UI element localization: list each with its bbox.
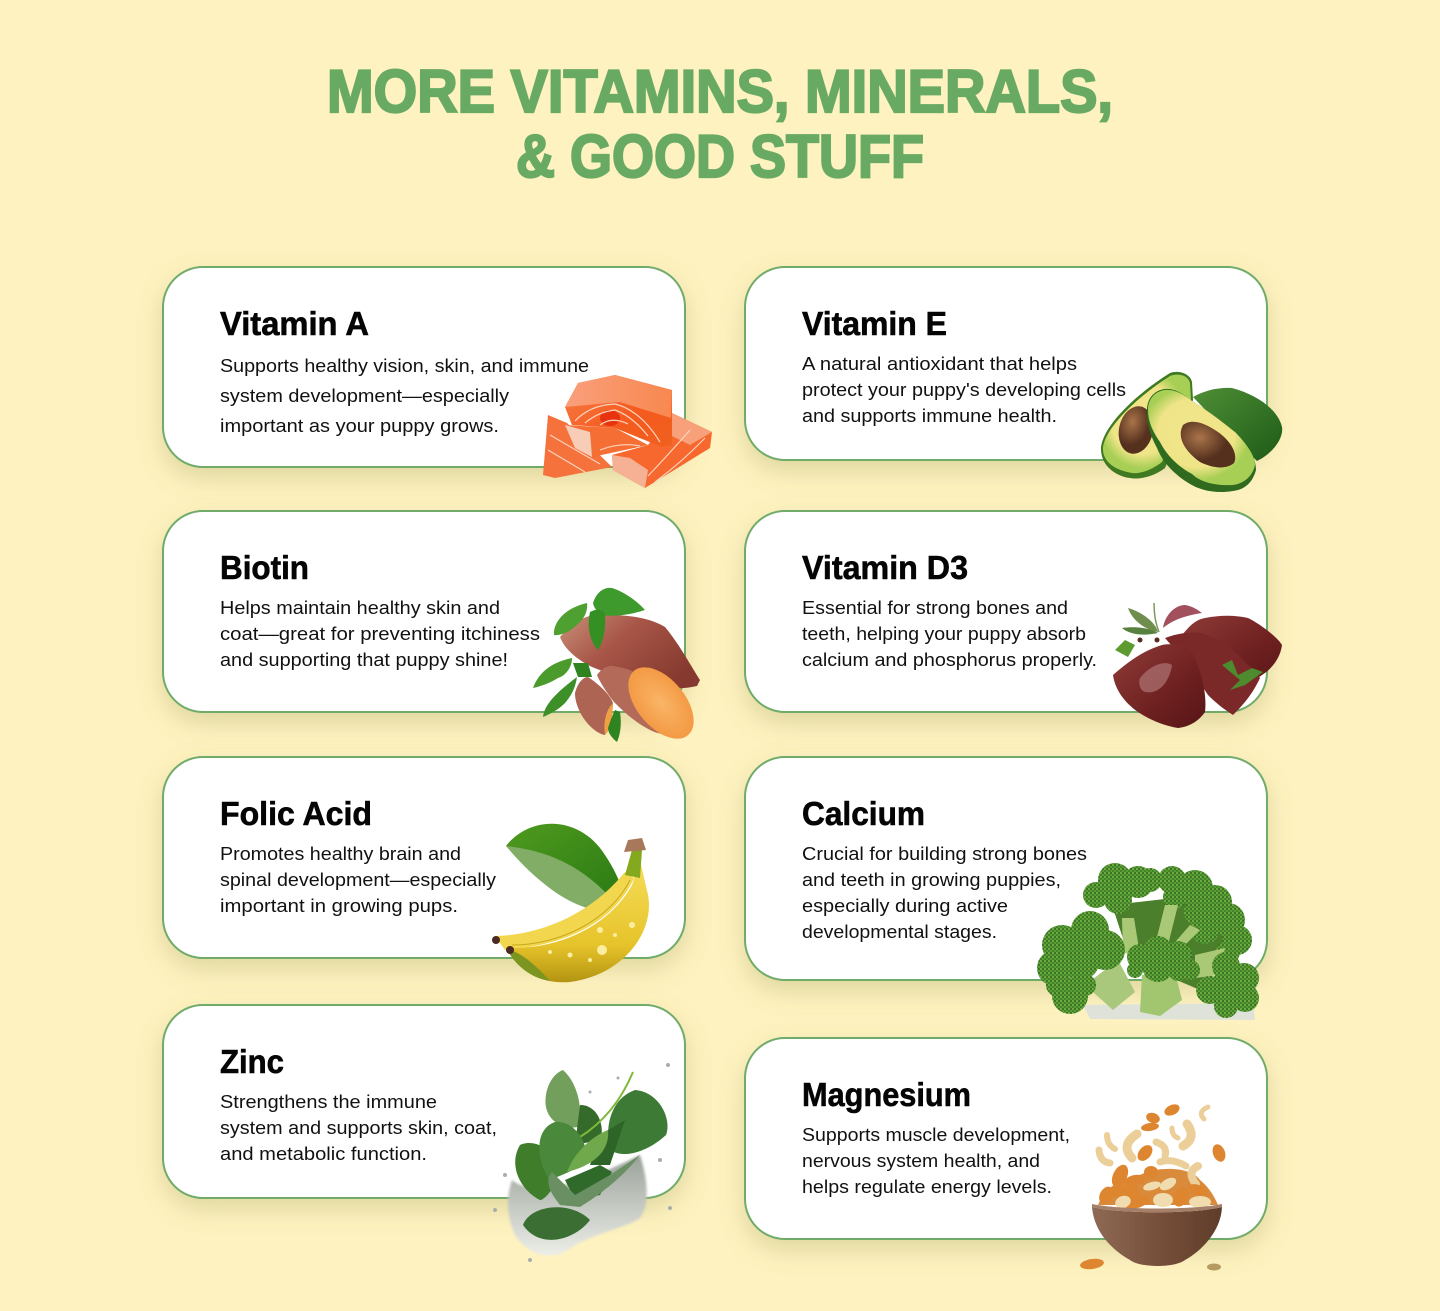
panel: Calcium [745,757,1267,1020]
heading: Folic Acid: Folic Acid [220,795,372,832]
text: Vitamin E description: A natural antioxidant that helps [802,353,1077,374]
heading: Biotin: Biotin [220,549,309,586]
panel: Biotin [163,511,706,751]
icon: nuts in bowl [1079,1102,1228,1271]
text: Folic Acid description [220,843,497,916]
panel: Vitamin A [163,267,712,488]
icon: spinach [493,1063,672,1262]
heading: Vitamin A: Vitamin A [220,305,369,342]
text: Magnesium description: nervous system health, and [802,1150,1040,1171]
panel: Vitamin D3 [745,511,1282,728]
text: Vitamin D3 description: calcium and phosphorus properly. [802,649,1097,670]
text: Vitamin D3 description: Essential for strong bones and [802,597,1068,618]
text: Zinc description: and metabolic function. [220,1143,427,1164]
icon: banana [492,824,649,982]
text: Vitamin A description [220,355,589,436]
text: Biotin description: and supporting that puppy shine! [220,649,508,670]
text: Biotin description: Helps maintain healthy skin and [220,597,500,618]
text: Vitamin A description: system development—especially [220,385,510,406]
icon: sweet potato [533,588,706,751]
title: & GOOD STUFF [516,123,924,190]
icon: salmon [543,375,712,488]
text: Folic Acid description: spinal development—especially [220,869,497,890]
text: Biotin description [220,597,540,670]
text: Vitamin D3 description [802,597,1097,670]
panel: Magnesium [745,1038,1267,1271]
heading: Zinc: Zinc [220,1043,284,1080]
icon: avocado [1101,372,1282,492]
panel: Zinc [163,1005,685,1262]
text: Calcium description [802,843,1087,942]
text: Magnesium description: helps regulate energy levels. [802,1176,1052,1197]
panel: Folic Acid [163,757,685,982]
text: Zinc description [220,1091,497,1164]
text: Biotin description: coat—great for preventing itchiness [220,623,540,644]
text: Magnesium description: Supports muscle development, [802,1124,1070,1145]
text: Vitamin A description: Supports healthy vision, skin, and immune [220,355,589,376]
title [327,58,1113,190]
heading: Vitamin E: Vitamin E [802,305,947,342]
panel: Vitamin E [745,267,1282,492]
text: Calcium description: and teeth in growing puppies, [802,869,1061,890]
heading: Vitamin D3: Vitamin D3 [802,549,968,586]
text: Vitamin E description: and supports immune health. [802,405,1057,426]
text: Zinc description: Strengthens the immune [220,1091,437,1112]
text: Vitamin E description: protect your puppy's developing cells [802,379,1126,400]
text: Folic Acid description: Promotes healthy brain and [220,843,461,864]
text: Magnesium description [802,1124,1070,1197]
text: Zinc description: system and supports skin, coat, [220,1117,497,1138]
text: Vitamin D3 description: teeth, helping your puppy absorb [802,623,1086,644]
text: Folic Acid description: important in growing pups. [220,895,458,916]
text: Vitamin A description: important as your puppy grows. [220,415,499,436]
heading: Calcium: Calcium [802,795,925,832]
title: MORE VITAMINS, MINERALS, [327,58,1113,125]
text: Calcium description: developmental stages. [802,921,997,942]
heading: Magnesium: Magnesium [802,1076,971,1113]
icon: broccoli [1037,863,1259,1020]
text: Calcium description: Crucial for building strong bones [802,843,1087,864]
icon: liver [1113,603,1282,728]
text: Vitamin E description [802,353,1126,426]
text: Calcium description: especially during active [802,895,1008,916]
